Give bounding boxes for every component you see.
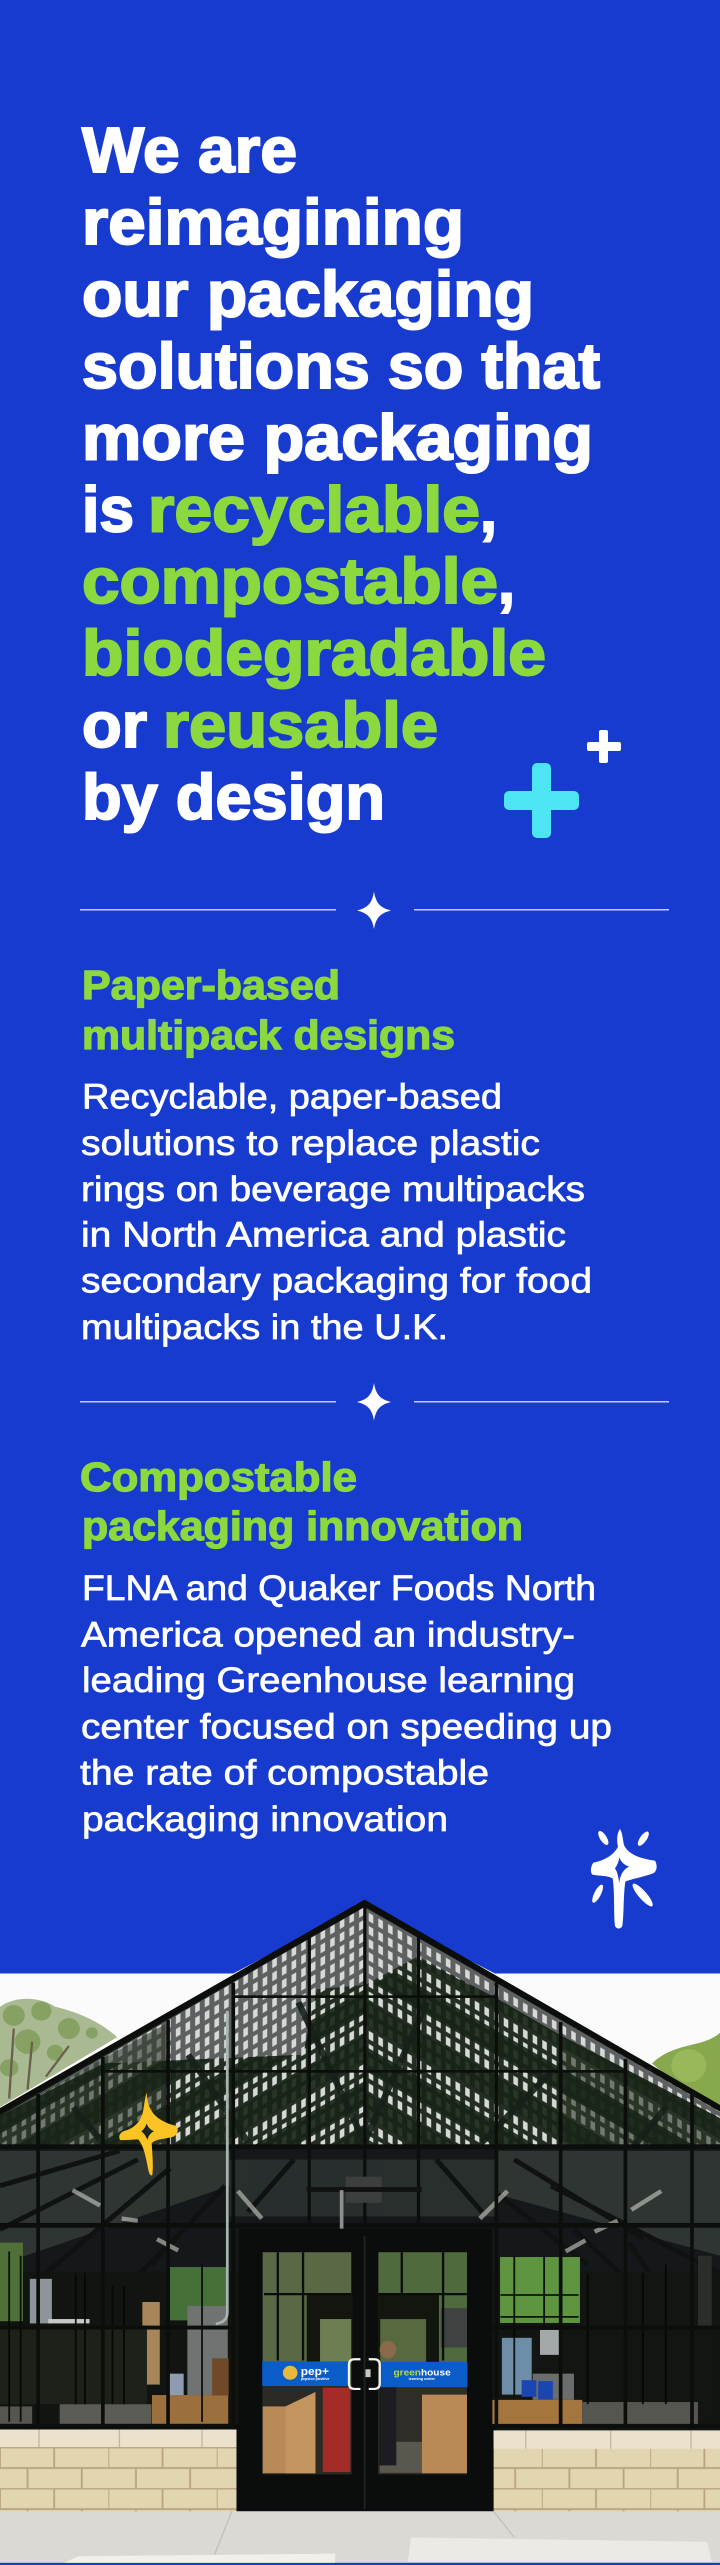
body text: paper-based: secondary packaging for food — [81, 1262, 592, 1300]
icon: white sparkle — [590, 1829, 657, 1928]
icon: yellow sparkle — [119, 2092, 178, 2175]
roof beams — [73, 2002, 666, 2146]
body text: paper-based — [81, 1078, 592, 1347]
heading: paper-based: multipack designs — [82, 1012, 455, 1058]
body text: compostable: center focused on speeding up — [81, 1708, 612, 1746]
section: compostable packaging innovation — [80, 1454, 612, 1839]
door banner: greenhouse: learning center — [409, 2377, 436, 2381]
roof tree reflection — [0, 1956, 720, 2146]
door banner: pep+: pep+ — [301, 2365, 329, 2378]
body text: compostable: the rate of compostable — [80, 1754, 489, 1792]
roof glass upper — [0, 1907, 720, 2146]
bottom strip — [0, 2563, 720, 2565]
door banner: greenhouse: greenhouse — [394, 2368, 451, 2378]
heading: paper-based: Paper-based — [82, 962, 340, 1008]
door banner: pep+: pepsico positive — [301, 2377, 329, 2381]
body text: compostable: packaging innovation — [82, 1800, 448, 1839]
title: or — [82, 689, 147, 761]
icon: plus signs — [504, 730, 621, 838]
roof slats — [0, 1897, 367, 2151]
title — [82, 114, 600, 833]
title: , — [498, 545, 515, 617]
ceiling lights — [73, 2190, 661, 2251]
white sliver on roof edges — [233, 1947, 495, 1977]
interior mullions — [9, 2251, 666, 2422]
body text: paper-based: Recyclable, paper-based — [82, 1078, 502, 1116]
divider 1 — [80, 892, 669, 929]
lower interior behind glass — [0, 2243, 720, 2425]
body text: compostable: America opened an industry- — [81, 1616, 575, 1654]
title: is — [82, 474, 134, 546]
title: reimagining — [82, 186, 464, 258]
roof dark bands — [0, 1989, 365, 2146]
dark base behind door — [234, 2426, 496, 2511]
doors — [239, 2229, 492, 2509]
door banner: pep+ — [262, 2361, 349, 2386]
body text: compostable: FLNA and Quaker Foods North — [82, 1569, 596, 1608]
conduit and sign — [216, 2011, 422, 2324]
title: by design — [82, 761, 385, 833]
title: more packaging — [82, 402, 593, 474]
interior floor and planters — [263, 2386, 351, 2474]
title: compostable — [82, 545, 498, 617]
body text: compostable — [80, 1569, 612, 1839]
heading: compostable: Compostable — [80, 1454, 357, 1500]
heading: paper-based — [82, 962, 455, 1058]
body text: paper-based: solutions to replace plastic — [81, 1124, 540, 1163]
sky — [0, 1973, 720, 2323]
lower roof interior — [0, 2150, 720, 2272]
title: We are — [82, 114, 297, 186]
body text: compostable: leading Greenhouse learning — [82, 1661, 575, 1700]
heading: compostable: packaging innovation — [82, 1503, 523, 1549]
door handles — [349, 2359, 380, 2389]
title: biodegradable — [82, 617, 546, 689]
title: recyclable — [148, 474, 480, 546]
sidewalk — [0, 2511, 720, 2563]
divider 2 — [80, 1383, 669, 1420]
body text: paper-based: multipacks in the U.K. — [81, 1308, 448, 1347]
glass gable — [0, 1900, 720, 2430]
title: solutions so that — [82, 330, 600, 402]
body text: paper-based: rings on beverage multipacks — [81, 1170, 585, 1209]
section: paper-based multipack designs — [81, 962, 592, 1347]
heading: compostable — [80, 1454, 523, 1549]
title: reusable — [163, 689, 438, 761]
greenhouse frame — [0, 1900, 720, 2429]
trees — [0, 1999, 720, 2112]
door banner: greenhouse — [381, 2362, 467, 2387]
stone wall — [0, 2430, 720, 2514]
title: our packaging — [82, 258, 534, 330]
photo: greenhouse building — [0, 1897, 720, 2563]
title: , — [480, 474, 497, 546]
side slats dim — [0, 2024, 720, 2146]
body text: paper-based: in North America and plastic — [81, 1216, 566, 1254]
